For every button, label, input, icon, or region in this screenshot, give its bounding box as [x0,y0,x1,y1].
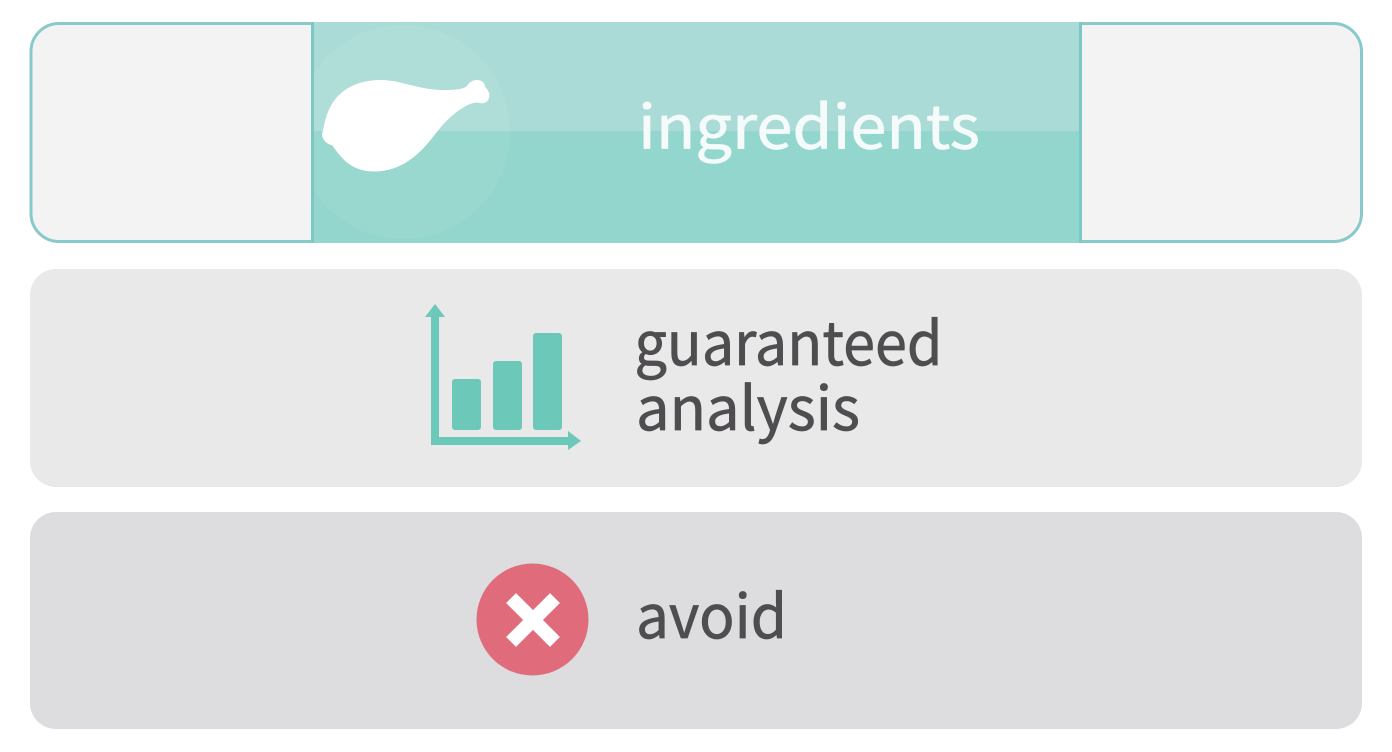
heading: avoid: avoid [636,569,787,656]
icon: red cross [476,564,588,676]
panel outline and light background [31,24,1362,242]
panel background [30,269,1362,487]
heading: guaranteed analysis: analysis [636,361,860,448]
teal centre band [296,22,1082,243]
heading: ingredients: ingredients [638,80,980,166]
heading: guaranteed analysis [634,296,942,448]
heading: guaranteed analysis: guaranteed [634,296,942,383]
panel: avoid [30,512,1362,729]
panel: guaranteed analysis [30,269,1362,487]
icon: chicken drumstick [322,80,489,172]
panel background [30,512,1362,729]
panel: ingredients [31,22,1362,243]
icon: bar chart [425,304,581,450]
